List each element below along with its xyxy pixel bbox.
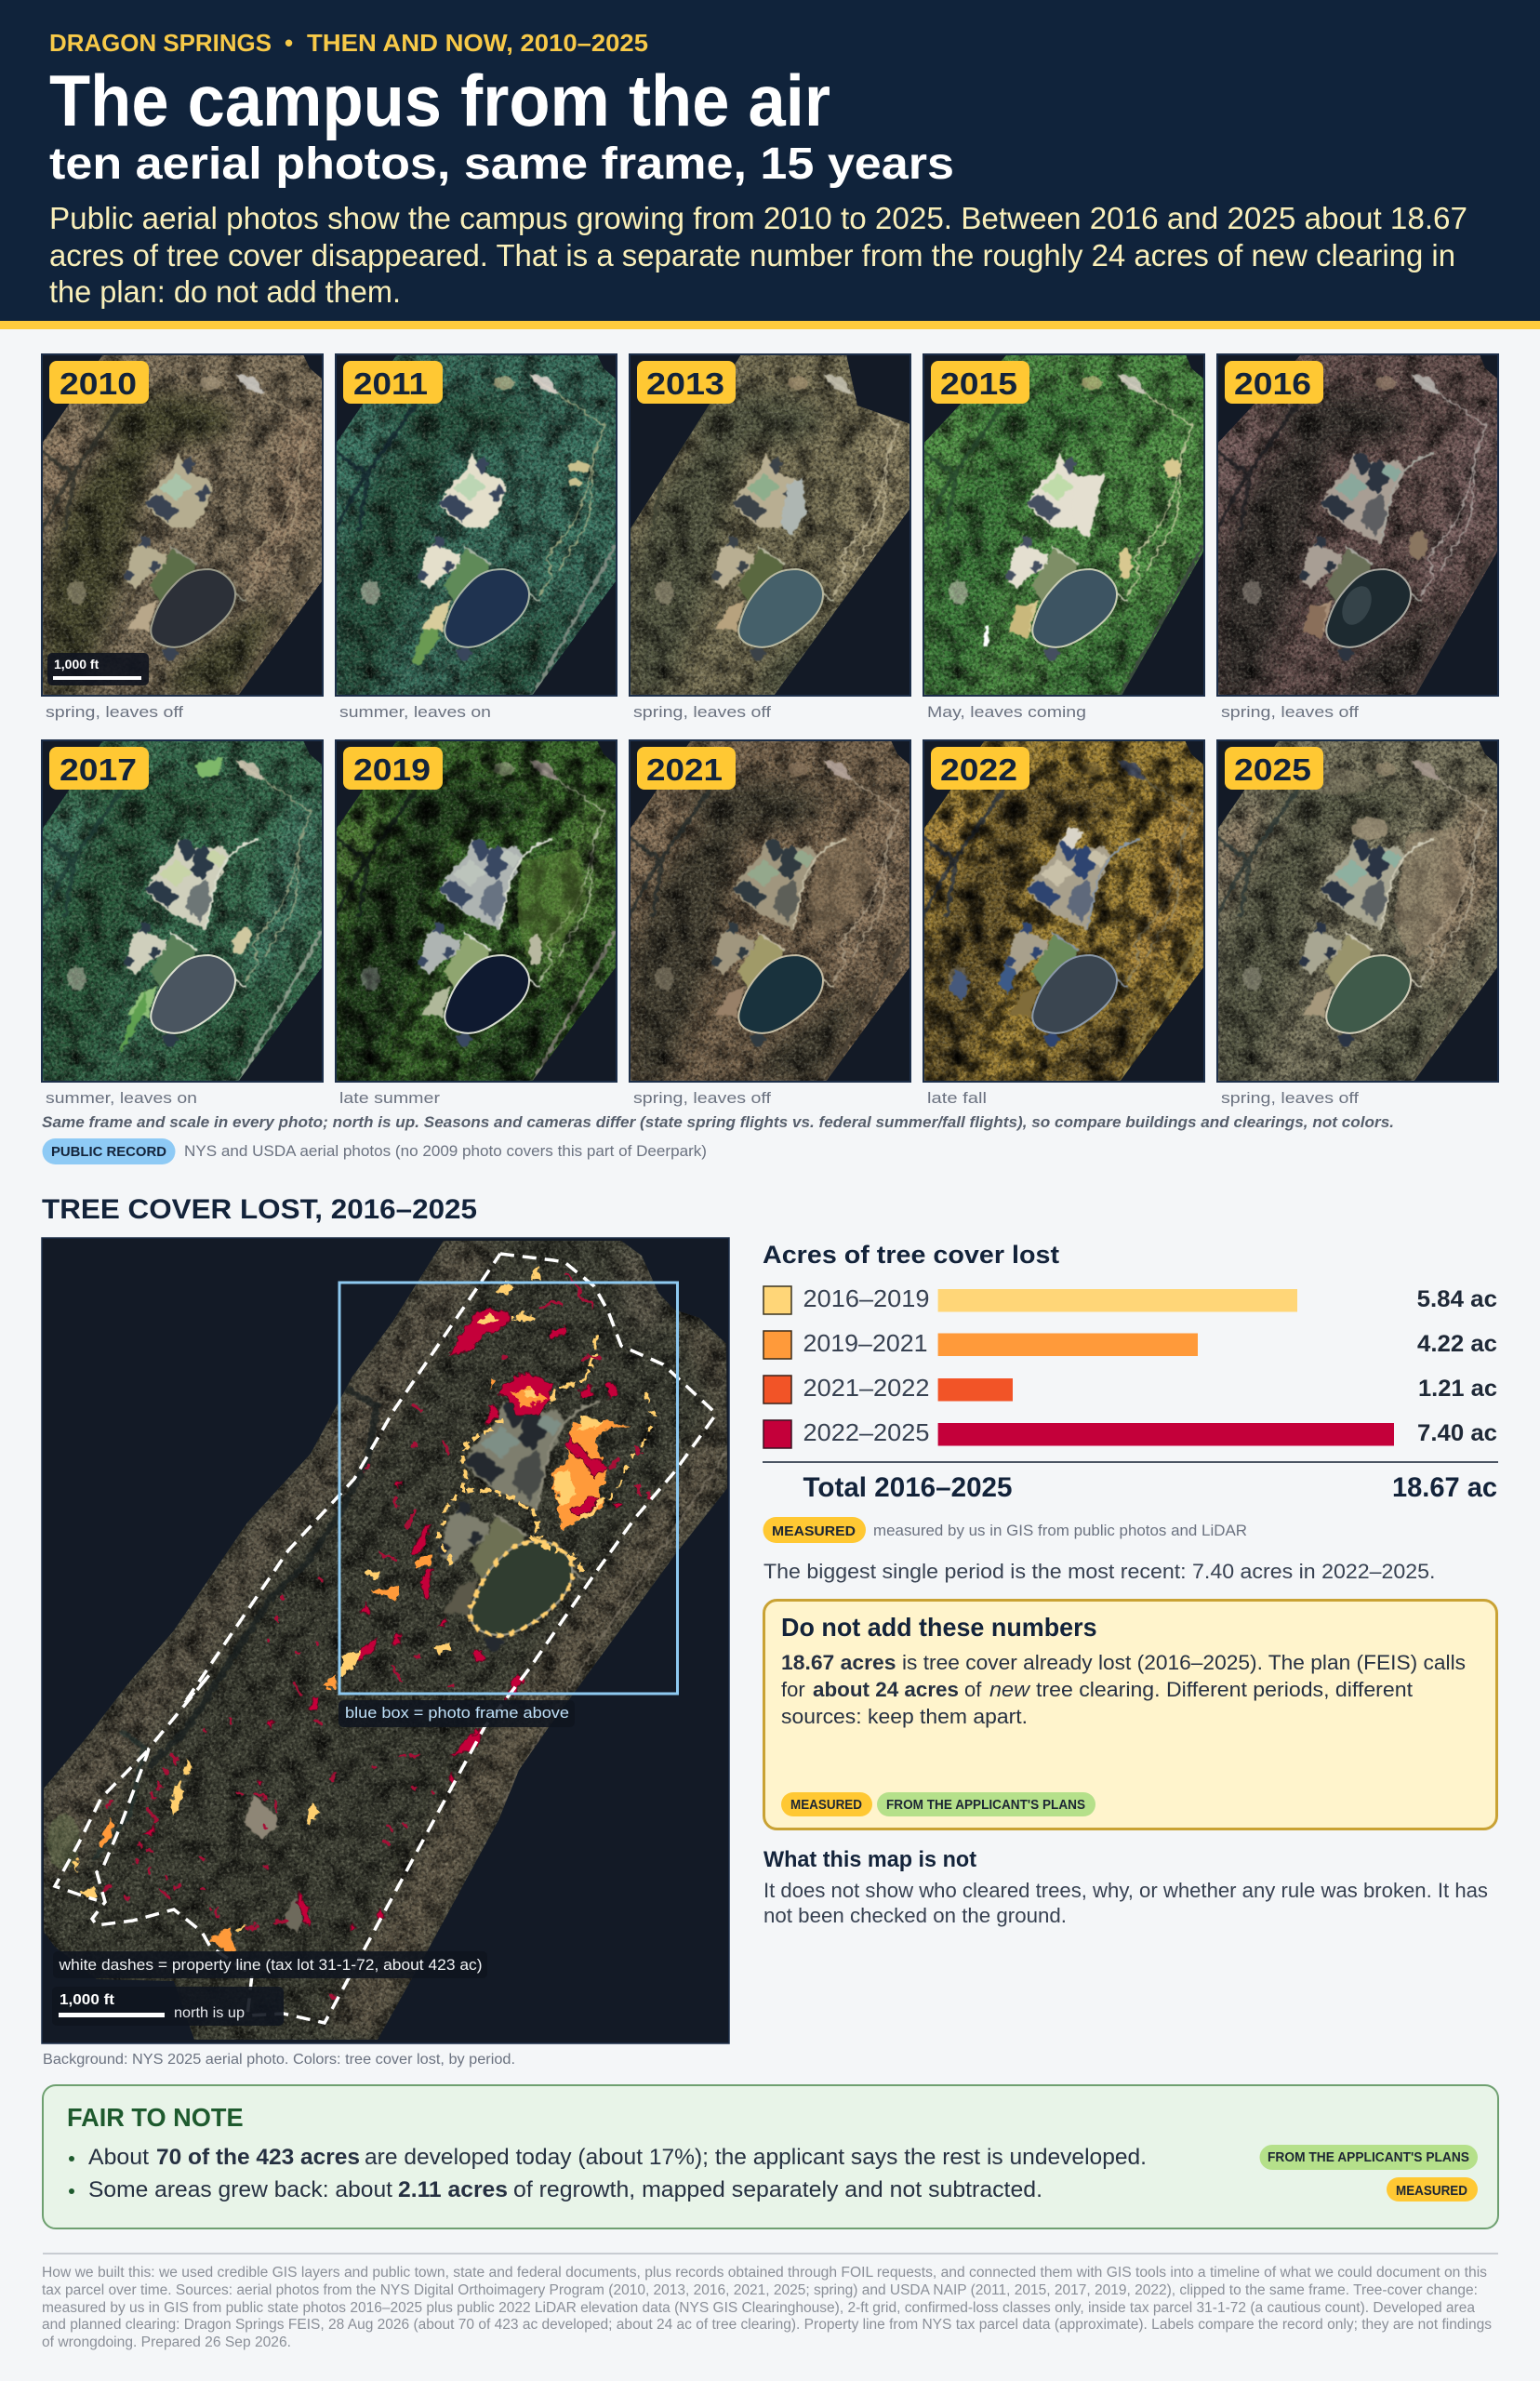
title: The campus from the air bbox=[49, 60, 830, 141]
row 2016-2019: 2016–2019 bbox=[803, 1284, 930, 1312]
kicker: DRAGON SPRINGS bbox=[49, 29, 272, 57]
map scale bar: north is up bbox=[174, 2005, 245, 2021]
aerial background bbox=[37, 1237, 730, 2046]
bullet one: 70 of the 423 acres bbox=[156, 2145, 360, 2170]
public record source line: NYS and USDA aerial photos (no 2009 photo covers this part of Deerpark) bbox=[184, 1143, 707, 1160]
kicker bbox=[49, 29, 648, 57]
callout body bbox=[781, 1651, 1466, 1728]
total row: Total 2016–2025 bbox=[803, 1472, 1012, 1503]
year badge 2013: 2013 bbox=[646, 366, 724, 401]
photo frame box bbox=[339, 1283, 677, 1694]
callout body: about 24 acres bbox=[813, 1678, 959, 1701]
callout body: is tree cover already lost (2016–2025). The plan (FEIS) calls bbox=[902, 1651, 1466, 1674]
callout tags: FROM THE APPLICANT'S PLANS bbox=[886, 1798, 1085, 1813]
photo 2011 bbox=[336, 354, 617, 696]
key sentence: The biggest single period is the most recent: 7.40 acres in 2022–2025. bbox=[763, 1560, 1436, 1583]
year badge 2010 bbox=[49, 361, 149, 404]
what this map is not: It does not show who cleared trees, why, or whether any rule was broken. It has bbox=[763, 1879, 1488, 1902]
map caption: Background: NYS 2025 aerial photo. Colors: tree cover lost, by period. bbox=[43, 2052, 515, 2068]
measured source line: MEASURED bbox=[772, 1524, 856, 1539]
property line label bbox=[53, 1951, 487, 1978]
blue box label: blue box = photo frame above bbox=[345, 1705, 569, 1722]
bullet two: 2.11 acres bbox=[398, 2177, 508, 2202]
methods footer: How we built this: we used credible GIS layers and public town, state and federal documents, plus records obtained through FOIL requests, and connected them with GIS tools into a timeline of what we could document on this bbox=[42, 2265, 1487, 2281]
year badge 2019: 2019 bbox=[353, 752, 431, 787]
caption 2017: summer, leaves on bbox=[46, 1089, 197, 1107]
intro text bbox=[49, 201, 1467, 309]
photo 2022 bbox=[923, 740, 1204, 1082]
public record source line: PUBLIC RECORD bbox=[51, 1145, 166, 1160]
caption 2019: late summer bbox=[339, 1089, 440, 1107]
row 2019-2021 bbox=[763, 1329, 1497, 1359]
methods footer: measured by us in GIS from public state photos 2016–2025 plus public 2022 LiDAR elevation data (NYS GIS Clearinghouse), 2-ft grid, confirmed-loss classes only, inside tax parcel 31-1-72 (a cautious count). Developed area bbox=[42, 2300, 1475, 2316]
row 2019-2021: 4.22 ac bbox=[1417, 1331, 1497, 1357]
photo grid note: Same frame and scale in every photo; north is up. Seasons and cameras differ (state spring flights vs. federal summer/fall flights), so compare buildings and clearings, not colors. bbox=[42, 1113, 1394, 1131]
what this map is not: What this map is not bbox=[763, 1847, 976, 1872]
row 2021-2022: 1.21 ac bbox=[1418, 1376, 1497, 1402]
year badge 2019 bbox=[343, 747, 443, 790]
public record source line bbox=[43, 1138, 707, 1164]
year badge 2025: 2025 bbox=[1234, 752, 1311, 787]
year badge 2011 bbox=[343, 361, 443, 404]
panel: fair to note bbox=[43, 2085, 1498, 2228]
year badge 2016 bbox=[1225, 361, 1323, 404]
year badge 2021: 2021 bbox=[646, 752, 723, 787]
intro text: Public aerial photos show the campus growing from 2010 to 2025. Between 2016 and 2025 about 18.67 bbox=[49, 201, 1467, 235]
callout body: new bbox=[989, 1678, 1031, 1701]
scale bar bbox=[47, 653, 149, 685]
total row bbox=[803, 1472, 1497, 1503]
photo 2019 bbox=[336, 740, 617, 1082]
map: tree cover lost bbox=[37, 1237, 730, 2046]
measured source line: measured by us in GIS from public photos and LiDAR bbox=[873, 1522, 1247, 1539]
row 2022-2025: 2022–2025 bbox=[803, 1418, 930, 1446]
section heading: TREE COVER LOST, 2016–2025 bbox=[42, 1194, 477, 1225]
row 2022-2025 bbox=[763, 1418, 1497, 1448]
total row: 18.67 ac bbox=[1392, 1472, 1497, 1503]
caption 2010: spring, leaves off bbox=[46, 703, 183, 721]
tag: plans bbox=[1259, 2145, 1478, 2170]
callout tags bbox=[781, 1792, 1095, 1816]
row 2021-2022 bbox=[763, 1374, 1497, 1403]
year badge 2022 bbox=[931, 747, 1029, 790]
year badge 2010: 2010 bbox=[60, 366, 137, 401]
year badge 2015: 2015 bbox=[940, 366, 1017, 401]
caption 2013: spring, leaves off bbox=[633, 703, 771, 721]
intro text: acres of tree cover disappeared. That is a separate number from the roughly 24 acres of new clearing in bbox=[49, 238, 1455, 273]
caption 2025: spring, leaves off bbox=[1221, 1089, 1359, 1107]
pond edge loss ring bbox=[471, 1541, 572, 1635]
photo 2016 bbox=[1217, 354, 1498, 696]
intro text: the plan: do not add them. bbox=[49, 274, 401, 309]
chart title: Acres of tree cover lost bbox=[763, 1241, 1059, 1269]
property line label: white dashes = property line (tax lot 31-1-72, about 423 ac) bbox=[58, 1957, 483, 1974]
year badge 2016: 2016 bbox=[1234, 366, 1311, 401]
subtitle: ten aerial photos, same frame, 15 years bbox=[49, 140, 954, 189]
methods footer: and planned clearing: Dragon Springs FEIS, 28 Aug 2026 (about 70 of 423 ac developed; about 24 ac of tree clearing). Property line from NYS tax parcel data (approximate). Labels compare the record only; they are not findings bbox=[42, 2317, 1492, 2333]
what this map is not bbox=[763, 1847, 1488, 1927]
map scale bar: 1,000 ft bbox=[60, 1992, 115, 2008]
year badge 2013 bbox=[637, 361, 736, 404]
year badge 2011: 2011 bbox=[353, 366, 428, 401]
year badge 2021 bbox=[637, 747, 736, 790]
methods footer: of wrongdoing. Prepared 26 Sep 2026. bbox=[42, 2334, 291, 2350]
methods footer bbox=[42, 2265, 1492, 2350]
tag: measured: MEASURED bbox=[1396, 2184, 1467, 2199]
callout body: for bbox=[781, 1678, 805, 1701]
bullet two bbox=[69, 2177, 1042, 2202]
bullet two: of regrowth, mapped separately and not subtracted. bbox=[513, 2177, 1042, 2202]
callout heading: Do not add these numbers bbox=[781, 1613, 1097, 1642]
callout tags: MEASURED bbox=[790, 1798, 862, 1813]
property line bbox=[55, 1254, 715, 2023]
methods footer: tax parcel over time. Sources: aerial photos from the NYS Digital Orthoimagery Program (2010, 2013, 2016, 2021, 2025; spring) and USDA NAIP (2011, 2015, 2017, 2019, 2022), clipped to the same frame. Tree-cover change: bbox=[42, 2282, 1478, 2298]
callout body: of bbox=[964, 1678, 982, 1701]
photo 2015 bbox=[923, 354, 1204, 696]
what this map is not: not been checked on the ground. bbox=[763, 1904, 1067, 1927]
tag: measured bbox=[1387, 2177, 1478, 2201]
row 2016-2019 bbox=[763, 1284, 1497, 1314]
photo 2021 bbox=[630, 740, 910, 1082]
callout: do not add bbox=[764, 1600, 1497, 1829]
row 2016-2019: 5.84 ac bbox=[1417, 1286, 1497, 1312]
photo 2013 bbox=[630, 354, 910, 696]
kicker: • bbox=[285, 29, 293, 57]
row 2022-2025: 7.40 ac bbox=[1417, 1420, 1497, 1446]
caption 2015: May, leaves coming bbox=[927, 703, 1086, 721]
caption 2022: late fall bbox=[927, 1089, 987, 1107]
caption 2011: summer, leaves on bbox=[339, 703, 491, 721]
bullet one: are developed today (about 17%); the applicant says the rest is undeveloped. bbox=[365, 2145, 1147, 2170]
callout body: tree clearing. Different periods, different bbox=[1036, 1678, 1413, 1701]
bullet one: About bbox=[88, 2145, 149, 2170]
map scale bar bbox=[52, 1987, 284, 2026]
caption 2016: spring, leaves off bbox=[1221, 703, 1359, 721]
panel heading: FAIR TO NOTE bbox=[67, 2103, 244, 2132]
year badge 2017: 2017 bbox=[60, 752, 137, 787]
caption 2021: spring, leaves off bbox=[633, 1089, 771, 1107]
year badge 2025 bbox=[1225, 747, 1323, 790]
tag: plans: FROM THE APPLICANT'S PLANS bbox=[1268, 2150, 1469, 2165]
photo 2025 bbox=[1217, 740, 1498, 1082]
year badge 2017 bbox=[49, 747, 149, 790]
scale bar: 1,000 ft bbox=[54, 657, 100, 672]
blue box label bbox=[339, 1700, 575, 1727]
year badge 2022: 2022 bbox=[940, 752, 1017, 787]
row 2021-2022: 2021–2022 bbox=[803, 1374, 930, 1402]
callout body: 18.67 acres bbox=[781, 1651, 896, 1674]
tree cover loss patches bbox=[73, 1267, 654, 1998]
callout body: sources: keep them apart. bbox=[781, 1705, 1028, 1728]
header banner bbox=[0, 0, 1540, 329]
measured source line bbox=[763, 1517, 1247, 1543]
bullet two: Some areas grew back: about bbox=[88, 2177, 392, 2202]
photo 2017 bbox=[42, 740, 323, 1082]
kicker: THEN AND NOW, 2010–2025 bbox=[307, 29, 648, 57]
bar chart: acres lost bbox=[763, 1241, 1498, 1503]
row 2019-2021: 2019–2021 bbox=[803, 1329, 928, 1357]
year badge 2015 bbox=[931, 361, 1029, 404]
photo 2010 bbox=[42, 354, 323, 696]
